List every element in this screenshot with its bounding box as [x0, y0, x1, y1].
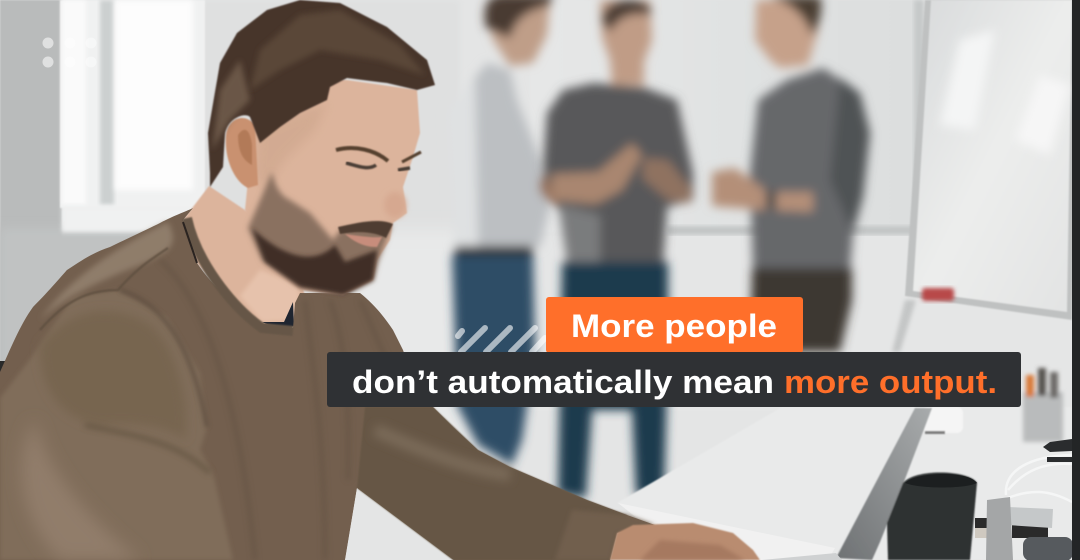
- person: middle colleague: [543, 0, 693, 498]
- person: right colleague: [712, 0, 870, 352]
- right screen edge: [1072, 0, 1080, 560]
- sweater folds: [160, 260, 395, 560]
- moustache: [338, 221, 393, 238]
- lips: [345, 234, 382, 247]
- headline label: don't automatically mean more output: don’t automatically mean: [352, 364, 774, 400]
- eyes: [346, 163, 410, 170]
- chair back: [0, 361, 8, 398]
- face: [245, 80, 420, 295]
- sweater floor gap: [345, 488, 455, 560]
- desk gadgets: [975, 518, 988, 528]
- dark undershirt: [262, 302, 294, 330]
- left sleeve: [0, 290, 233, 560]
- upper shoulder highlight: [40, 222, 173, 320]
- sweater body: [0, 208, 655, 560]
- beard dense: [252, 228, 377, 295]
- ear: [226, 118, 258, 188]
- headline label: More people: More people: [571, 308, 777, 344]
- eyebrow: [336, 148, 388, 161]
- icon: laptop lid: [836, 408, 932, 560]
- decorative window dots: [42, 38, 96, 68]
- right whiteboard: [892, 0, 1076, 352]
- hair: [208, 0, 435, 187]
- person: left colleague: [447, 0, 591, 465]
- person: main man in brown sweater: [0, 0, 760, 560]
- cables: [1003, 455, 1072, 502]
- beard stubble: [248, 172, 392, 295]
- desk with laptop and mug: [617, 368, 1073, 560]
- icon: pencil cup: [1023, 368, 1063, 442]
- icon: white cup: [923, 407, 963, 434]
- headline label: don't automatically mean more output: [327, 352, 1021, 407]
- hand: [610, 523, 760, 560]
- collar: [187, 218, 293, 331]
- neck: [183, 186, 306, 328]
- headline label: More people: [546, 297, 803, 353]
- right forearm: [357, 407, 627, 560]
- decorative diagonal stripes: [458, 328, 545, 352]
- icon: mug: [887, 472, 977, 560]
- headline label: don't automatically mean more output: more output.: [784, 364, 997, 400]
